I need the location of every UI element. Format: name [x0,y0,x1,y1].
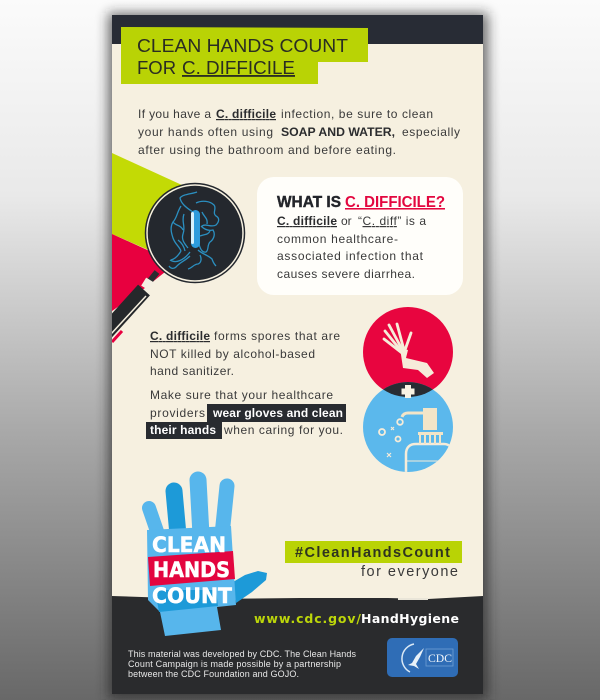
overlap lens [383,382,433,397]
hashtag banner: for everyone [361,564,458,580]
credit text [128,649,356,679]
what is C. difficile callout: associated infection that [277,249,424,263]
intro paragraph [138,107,460,157]
what is C. difficile callout: WHAT IS [277,194,341,211]
spores paragraph: C. difficile [150,329,210,343]
website url: www.cdc.gov/ [254,611,361,626]
healthcare providers paragraph: Make sure that your healthcare [150,388,333,402]
CDC logo: CDC [428,651,452,665]
spores paragraph: hand sanitizer. [150,364,234,378]
intro paragraph: after using the bathroom and before eating. [138,143,396,157]
title banner: FOR [137,57,176,78]
magnifying glass with bacterium [106,153,244,342]
hashtag banner: #CleanHandsCount [295,545,450,561]
what is C. difficile callout: or [341,214,352,228]
website url [254,611,459,626]
title banner: C. DIFFICILE [182,57,295,78]
what is C. difficile callout: “C. diff” is a [358,214,426,228]
what is C. difficile callout: C. DIFFICILE? [345,194,445,211]
clean hands count hand: COUNT [152,584,233,608]
icon: hand pulling glove [384,324,434,378]
credit text: This material was developed by CDC. The Clean Hands [128,649,356,659]
what is C. difficile callout [257,177,463,295]
intro paragraph: your hands often using [138,125,273,139]
hashtag banner [285,541,462,580]
website url: HandHygiene [361,611,459,626]
healthcare providers paragraph: providers [150,406,205,420]
clean hands count hand: CLEAN [152,533,226,557]
icon: plus [402,385,414,398]
title banner: CLEAN HANDS COUNT [137,35,348,56]
clean hands count hand: HANDS [153,558,230,582]
bacterium rod [191,210,200,248]
healthcare providers paragraph: their hands [150,423,216,437]
icon: soap pump bottle [378,408,450,472]
intro paragraph: SOAP AND WATER, [281,125,395,139]
credit text: between the CDC Foundation and GOJO. [128,669,299,679]
title banner [121,27,368,84]
spores paragraph: NOT killed by alcohol-based [150,347,315,361]
healthcare providers paragraph: wear gloves and clean [212,406,343,420]
healthcare providers paragraph: when caring for you. [223,423,343,437]
healthcare providers paragraph [146,388,346,439]
intro paragraph: especially [402,125,460,139]
what is C. difficile callout: common healthcare- [277,232,398,246]
poster card [112,15,483,694]
footer dark band [112,596,483,694]
icon: gloves and soap circles [363,307,453,480]
spores paragraph: forms spores that are [214,329,340,343]
CDC logo [387,638,458,677]
intro paragraph: infection, be sure to clean [281,107,433,121]
what is C. difficile callout: C. difficile [277,214,337,228]
intro paragraph: C. difficile [216,107,276,121]
credit text: Count Campaign is made possible by a partnership [128,659,341,669]
what is C. difficile callout: causes severe diarrhea. [277,267,415,281]
bacterium flagella [169,192,219,269]
clean hands count hand [147,480,267,636]
intro paragraph: If you have a [138,107,211,121]
spores paragraph [150,329,340,378]
